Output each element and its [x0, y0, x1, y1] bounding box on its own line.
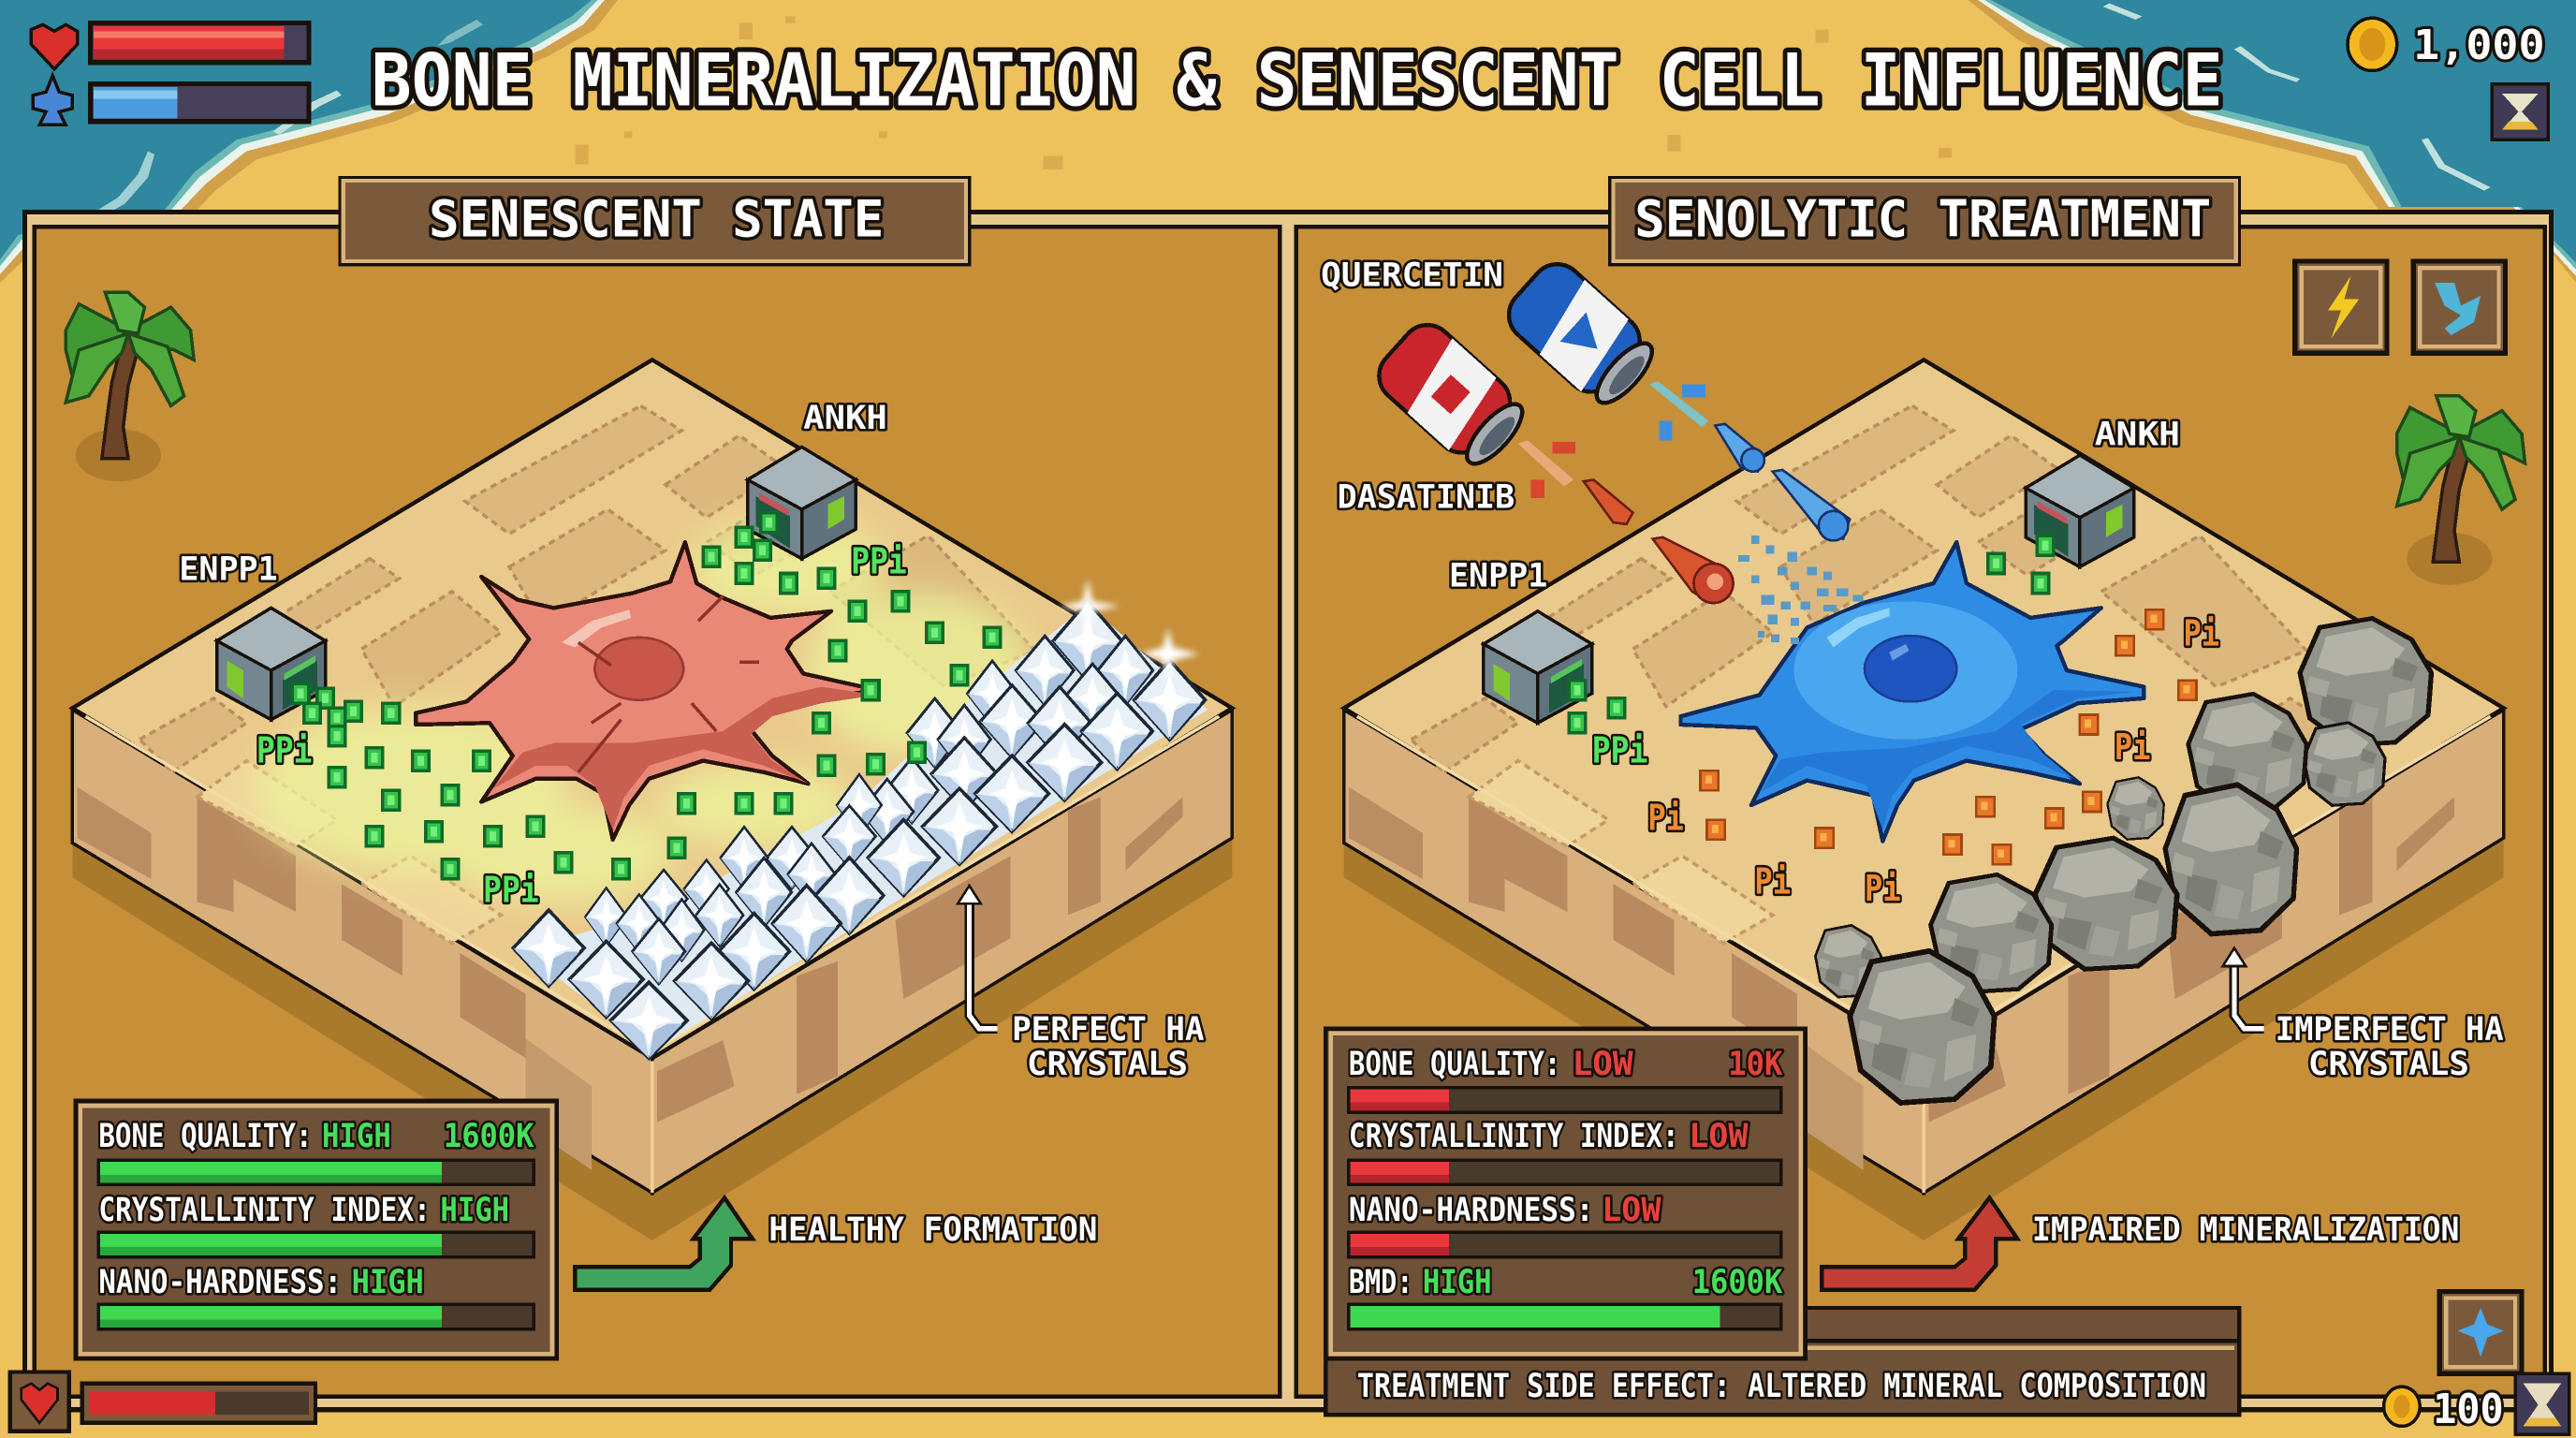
- ANKH machine, senescent state: [748, 447, 856, 559]
- right panel labels: Pi: [1865, 868, 1901, 910]
- left panel labels: PPi: [256, 729, 313, 771]
- Quercetin bottle: [1498, 254, 1664, 415]
- senolytic blue cell: [1680, 542, 2144, 842]
- stat: nano-hardness: NANO-HARDNESS:: [98, 1263, 342, 1301]
- HUD: mana bar: [91, 84, 309, 122]
- right panel labels: ANKH: [2095, 416, 2180, 454]
- left panel labels: [179, 399, 907, 912]
- stat: crystallinity index: [98, 1191, 534, 1257]
- perfect HA crystals: [513, 601, 1208, 1058]
- ENPP1 machine, senolytic treatment: [1484, 611, 1592, 723]
- stat: bone quality low: 10K: [1728, 1045, 1782, 1083]
- arrow: perfect HA crystals: [958, 886, 997, 1029]
- right panel labels: [1321, 256, 2219, 910]
- stat: nano-hardness low: [1349, 1191, 1781, 1257]
- stat: nano-hardness: [98, 1263, 534, 1329]
- sea: top right shoreline: [1969, 0, 2576, 283]
- stat: bone quality: BONE QUALITY:: [98, 1117, 313, 1155]
- icon button: blue star: [2439, 1291, 2522, 1373]
- palm tree left: [66, 292, 194, 481]
- callout: perfect HA crystals: [1012, 1010, 1204, 1083]
- stat: nano-hardness: HIGH: [352, 1263, 424, 1301]
- left panel labels: PPi: [851, 541, 907, 583]
- stat: BMD high: HIGH: [1423, 1263, 1492, 1301]
- right panel labels: Pi: [2183, 613, 2219, 655]
- callout: imperfect HA crystals: IMPERFECT HA: [2276, 1010, 2504, 1049]
- ENPP1 machine, senescent state: [217, 608, 326, 720]
- right panel labels: Pi: [1754, 861, 1791, 903]
- stat: crystallinity index low: [1349, 1117, 1781, 1184]
- HUD: health bar: [91, 23, 309, 63]
- right panel labels: ENPP1: [1449, 557, 1547, 595]
- right panel labels: DASATINIB: [1338, 477, 1515, 516]
- label: healthy formation: HEALTHY FORMATION: [768, 1211, 1097, 1249]
- banner: senescent state: SENESCENT STATE: [429, 190, 884, 249]
- bottom HUD: hourglass: [2515, 1373, 2569, 1434]
- stat: bone quality low: [1349, 1045, 1782, 1112]
- HUD: gold coin: [2348, 18, 2397, 70]
- senescent red cell: [416, 542, 877, 840]
- left panel labels: ANKH: [803, 399, 887, 437]
- panel: senescent state: [35, 227, 1280, 1397]
- orange Pi particles: [1701, 609, 2197, 864]
- HUD: health heart icon: [31, 24, 78, 69]
- sand speckles: [575, 17, 1952, 169]
- panel: senolytic treatment: [1296, 227, 2545, 1397]
- back tab behind side effect panel: [1799, 1308, 2239, 1344]
- stat: BMD high: 1600K: [1692, 1263, 1782, 1301]
- banner: senescent state: [339, 176, 971, 266]
- blue dissolving particles: [1738, 536, 1863, 644]
- title: BONE MINERALIZATION & SENESCENT CELL INFLUENCE: [372, 38, 2223, 123]
- callout: perfect HA crystals: CRYSTALS: [1027, 1045, 1188, 1083]
- callout: imperfect HA crystals: CRYSTALS: [2308, 1045, 2469, 1083]
- green PPi particles, right: [1569, 536, 2054, 733]
- HUD: coin count: 1,000: [2413, 22, 2545, 69]
- right isometric platform: [1344, 360, 2504, 1240]
- arrow: healthy formation: [575, 1197, 753, 1290]
- treatment side effect panel: [1325, 1341, 2239, 1415]
- label: impaired mineralization: IMPAIRED MINERALIZATION: [2032, 1211, 2459, 1249]
- stats panel: senolytic treatment: [1325, 1029, 1806, 1358]
- stats panel: senescent state: [76, 1101, 557, 1358]
- ANKH machine, senolytic treatment: [2026, 455, 2134, 566]
- right panel labels: PPi: [1592, 729, 1647, 771]
- left isometric platform: [72, 360, 1232, 1240]
- right panel labels: Pi: [2115, 726, 2150, 769]
- left panel labels: PPi: [483, 870, 539, 912]
- stat: crystallinity index low: LOW: [1689, 1117, 1749, 1155]
- right panel labels: Pi: [1647, 797, 1684, 839]
- green PPi particles, left: [292, 513, 1001, 879]
- stat: crystallinity index: HIGH: [440, 1191, 509, 1229]
- stat: BMD high: BMD:: [1349, 1263, 1412, 1301]
- Dasatinib bottle: [1368, 315, 1534, 476]
- stat: bone quality low: LOW: [1573, 1045, 1633, 1083]
- bottom HUD: health bar: [82, 1384, 315, 1423]
- arrow: impaired mineralization: [1822, 1197, 2017, 1290]
- stat: crystallinity index low: CRYSTALLINITY INDEX:: [1349, 1117, 1679, 1155]
- stat: nano-hardness low: NANO-HARDNESS:: [1349, 1191, 1593, 1229]
- callout: imperfect HA crystals: [2276, 1010, 2504, 1083]
- palm tree right: [2397, 396, 2525, 585]
- stat: BMD high: [1349, 1263, 1782, 1329]
- bottom HUD: coin: [2384, 1387, 2420, 1426]
- banner: senolytic treatment: SENOLYTIC TREATMENT: [1634, 190, 2211, 249]
- treatment side effect panel: TREATMENT SIDE EFFECT: ALTERED MINERAL COMPOSITION: [1357, 1367, 2206, 1405]
- crystal sparkles: [1058, 579, 1199, 681]
- left panel labels: ENPP1: [179, 550, 278, 589]
- arrow: imperfect HA crystals: [2223, 948, 2263, 1029]
- banner: senolytic treatment: [1608, 176, 2241, 266]
- stat: bone quality: 1600K: [444, 1117, 534, 1155]
- stat: nano-hardness low: LOW: [1602, 1191, 1661, 1229]
- callout: perfect HA crystals: PERFECT HA: [1012, 1010, 1204, 1049]
- icon button: water splash: [2413, 261, 2505, 353]
- drug projectiles: [1518, 381, 1850, 603]
- sea: top left shoreline: [0, 0, 618, 283]
- bottom HUD: coin count: 100: [2433, 1386, 2504, 1433]
- glow around PPi particles: [255, 518, 1035, 903]
- stat: bone quality: HIGH: [322, 1117, 391, 1155]
- HUD: mana icon: [33, 76, 72, 125]
- stat: bone quality low: BONE QUALITY:: [1349, 1045, 1560, 1083]
- HUD: hourglass: [2492, 84, 2548, 139]
- imperfect HA rocks: [1815, 619, 2431, 1103]
- stat: bone quality: [98, 1117, 534, 1184]
- right panel labels: QUERCETIN: [1321, 256, 1503, 294]
- stat: crystallinity index: CRYSTALLINITY INDEX:: [98, 1191, 431, 1229]
- bottom HUD: heart box: [10, 1372, 69, 1431]
- icon button: lightning: [2295, 261, 2387, 353]
